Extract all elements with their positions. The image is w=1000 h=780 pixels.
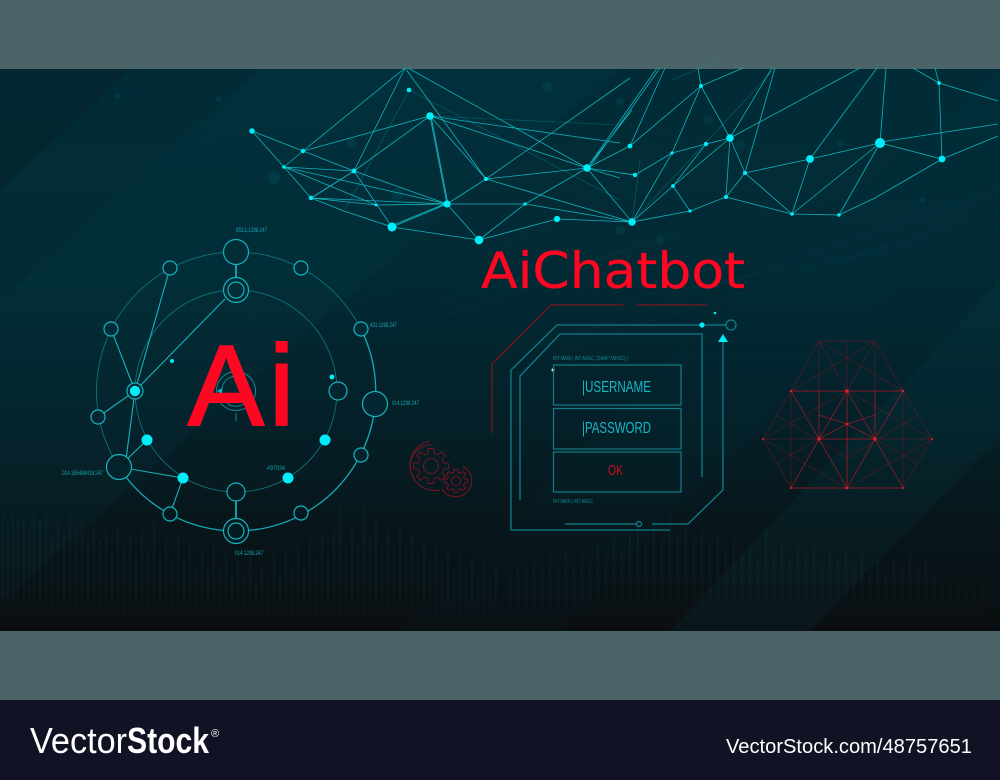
red frame lines	[492, 305, 707, 433]
neural network web	[249, 60, 998, 244]
node labels: 014.165488418.247	[62, 470, 103, 477]
node labels: 014.1298.247	[235, 550, 263, 557]
node labels: #97034	[267, 465, 285, 472]
OK button	[554, 452, 681, 492]
red hexagon lattice	[762, 341, 933, 489]
username field	[554, 365, 681, 405]
password field	[554, 408, 681, 449]
login panel	[492, 305, 736, 530]
node labels	[62, 227, 419, 557]
code captions: INT MAIN ( INT ARGC	[553, 499, 593, 505]
top band	[0, 0, 1000, 69]
title: AiChatbot: AiChatbot	[481, 242, 745, 300]
footer logo: VectorStock	[30, 720, 225, 761]
OK button: OK	[608, 463, 623, 479]
password field: |PASSWORD	[582, 420, 651, 437]
footer	[0, 700, 1000, 780]
icon: gears	[410, 441, 472, 497]
ring network diagram	[62, 227, 419, 557]
code captions	[553, 356, 628, 505]
footer image id: VectorStock.com/48757651	[726, 736, 972, 758]
lower band	[0, 631, 1000, 700]
teal frame lines	[511, 320, 736, 530]
main dark panel background	[0, 69, 1000, 631]
node labels: 431.1298.247	[370, 322, 397, 329]
faint rings	[96, 252, 376, 531]
panel dots	[552, 312, 728, 372]
node labels: 853.1.1298.247	[236, 227, 267, 234]
footer logo: ®	[211, 728, 219, 740]
username field: |USERNAME	[582, 379, 651, 396]
node labels: 014.1298.247	[392, 400, 419, 407]
Ai heading: Ai	[188, 323, 299, 450]
code captions: INT MAIN ( INT ARGC, CHAR **ARGC) {	[553, 356, 628, 362]
centre radar icon	[216, 372, 256, 421]
outer nodes	[91, 240, 388, 544]
filled nodes	[130, 359, 334, 484]
